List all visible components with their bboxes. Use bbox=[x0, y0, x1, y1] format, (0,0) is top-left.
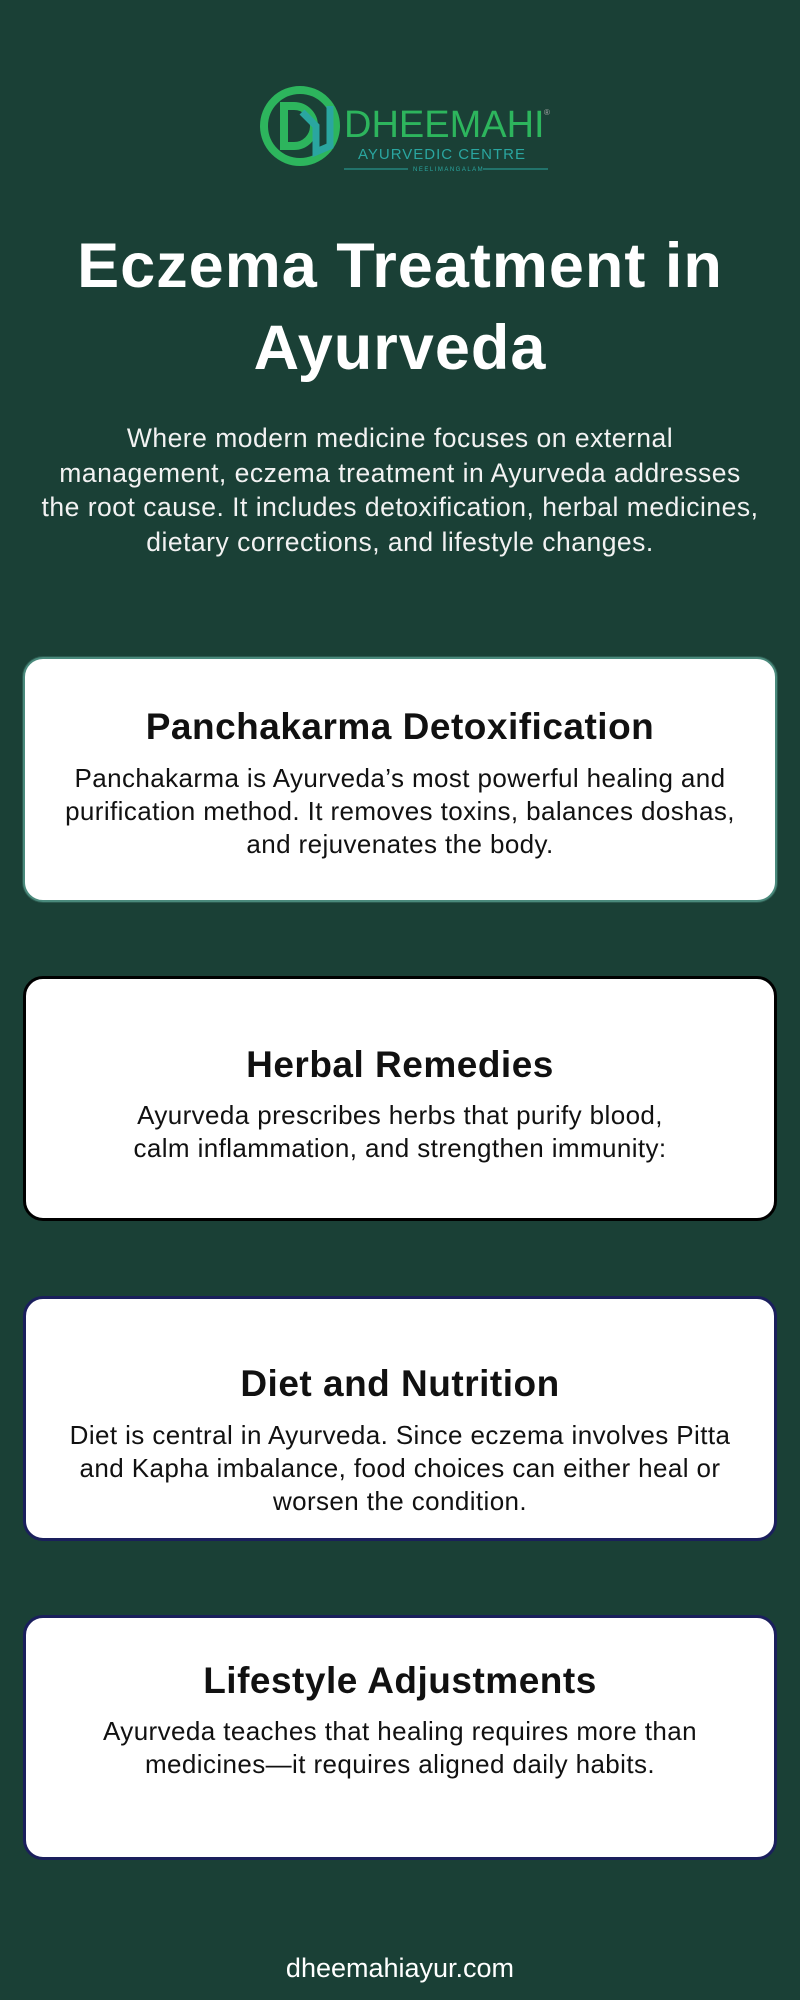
logo text: DHEEMAHI bbox=[344, 104, 545, 146]
panel: lifestyle: medicines—it requires aligned daily habits. bbox=[145, 1749, 655, 1779]
subtitle: the root cause. It includes detoxification, herbal medicines, bbox=[42, 492, 758, 522]
panel: panchakarma: Panchakarma Detoxification bbox=[146, 706, 654, 747]
panel: panchakarma: purification method. It removes toxins, balances doshas, bbox=[65, 796, 735, 826]
logo text: ® bbox=[544, 108, 550, 117]
subtitle: Where modern medicine focuses on external bbox=[127, 423, 673, 453]
panel: herbal remedies: Herbal Remedies bbox=[246, 1044, 554, 1085]
panel: panchakarma: and rejuvenates the body. bbox=[246, 829, 554, 859]
logo text: AYURVEDIC CENTRE bbox=[358, 146, 526, 163]
title: Eczema Treatment in bbox=[77, 231, 723, 301]
panel: diet: Diet is central in Ayurveda. Since eczema involves Pitta bbox=[70, 1420, 730, 1450]
subtitle: management, eczema treatment in Ayurveda addresses bbox=[59, 458, 741, 488]
panel: herbal remedies: calm inflammation, and strengthen immunity: bbox=[133, 1133, 667, 1163]
panel: panchakarma bbox=[23, 657, 777, 902]
icon: logo mark bbox=[264, 90, 336, 162]
panel: panchakarma: Panchakarma is Ayurveda’s most powerful healing and bbox=[74, 763, 726, 793]
panel: diet: Diet and Nutrition bbox=[240, 1363, 560, 1404]
title: Ayurveda bbox=[254, 313, 546, 383]
panel: diet bbox=[23, 1296, 777, 1541]
logo bbox=[260, 86, 550, 172]
panel: herbal remedies: Ayurveda prescribes herbs that purify blood, bbox=[137, 1100, 663, 1130]
subtitle bbox=[42, 423, 758, 556]
panel: diet: and Kapha imbalance, food choices can either heal or bbox=[80, 1453, 720, 1483]
subtitle: dietary corrections, and lifestyle changes. bbox=[146, 526, 654, 556]
panel: lifestyle bbox=[23, 1615, 777, 1860]
footer: dheemahiayur.com bbox=[286, 1953, 514, 1983]
panel: diet: worsen the condition. bbox=[273, 1486, 527, 1516]
panel: lifestyle: Ayurveda teaches that healing requires more than bbox=[103, 1716, 697, 1746]
logo text bbox=[344, 104, 550, 173]
panel: lifestyle: Lifestyle Adjustments bbox=[203, 1660, 597, 1701]
title bbox=[77, 231, 723, 383]
panel: herbal remedies bbox=[23, 976, 777, 1221]
